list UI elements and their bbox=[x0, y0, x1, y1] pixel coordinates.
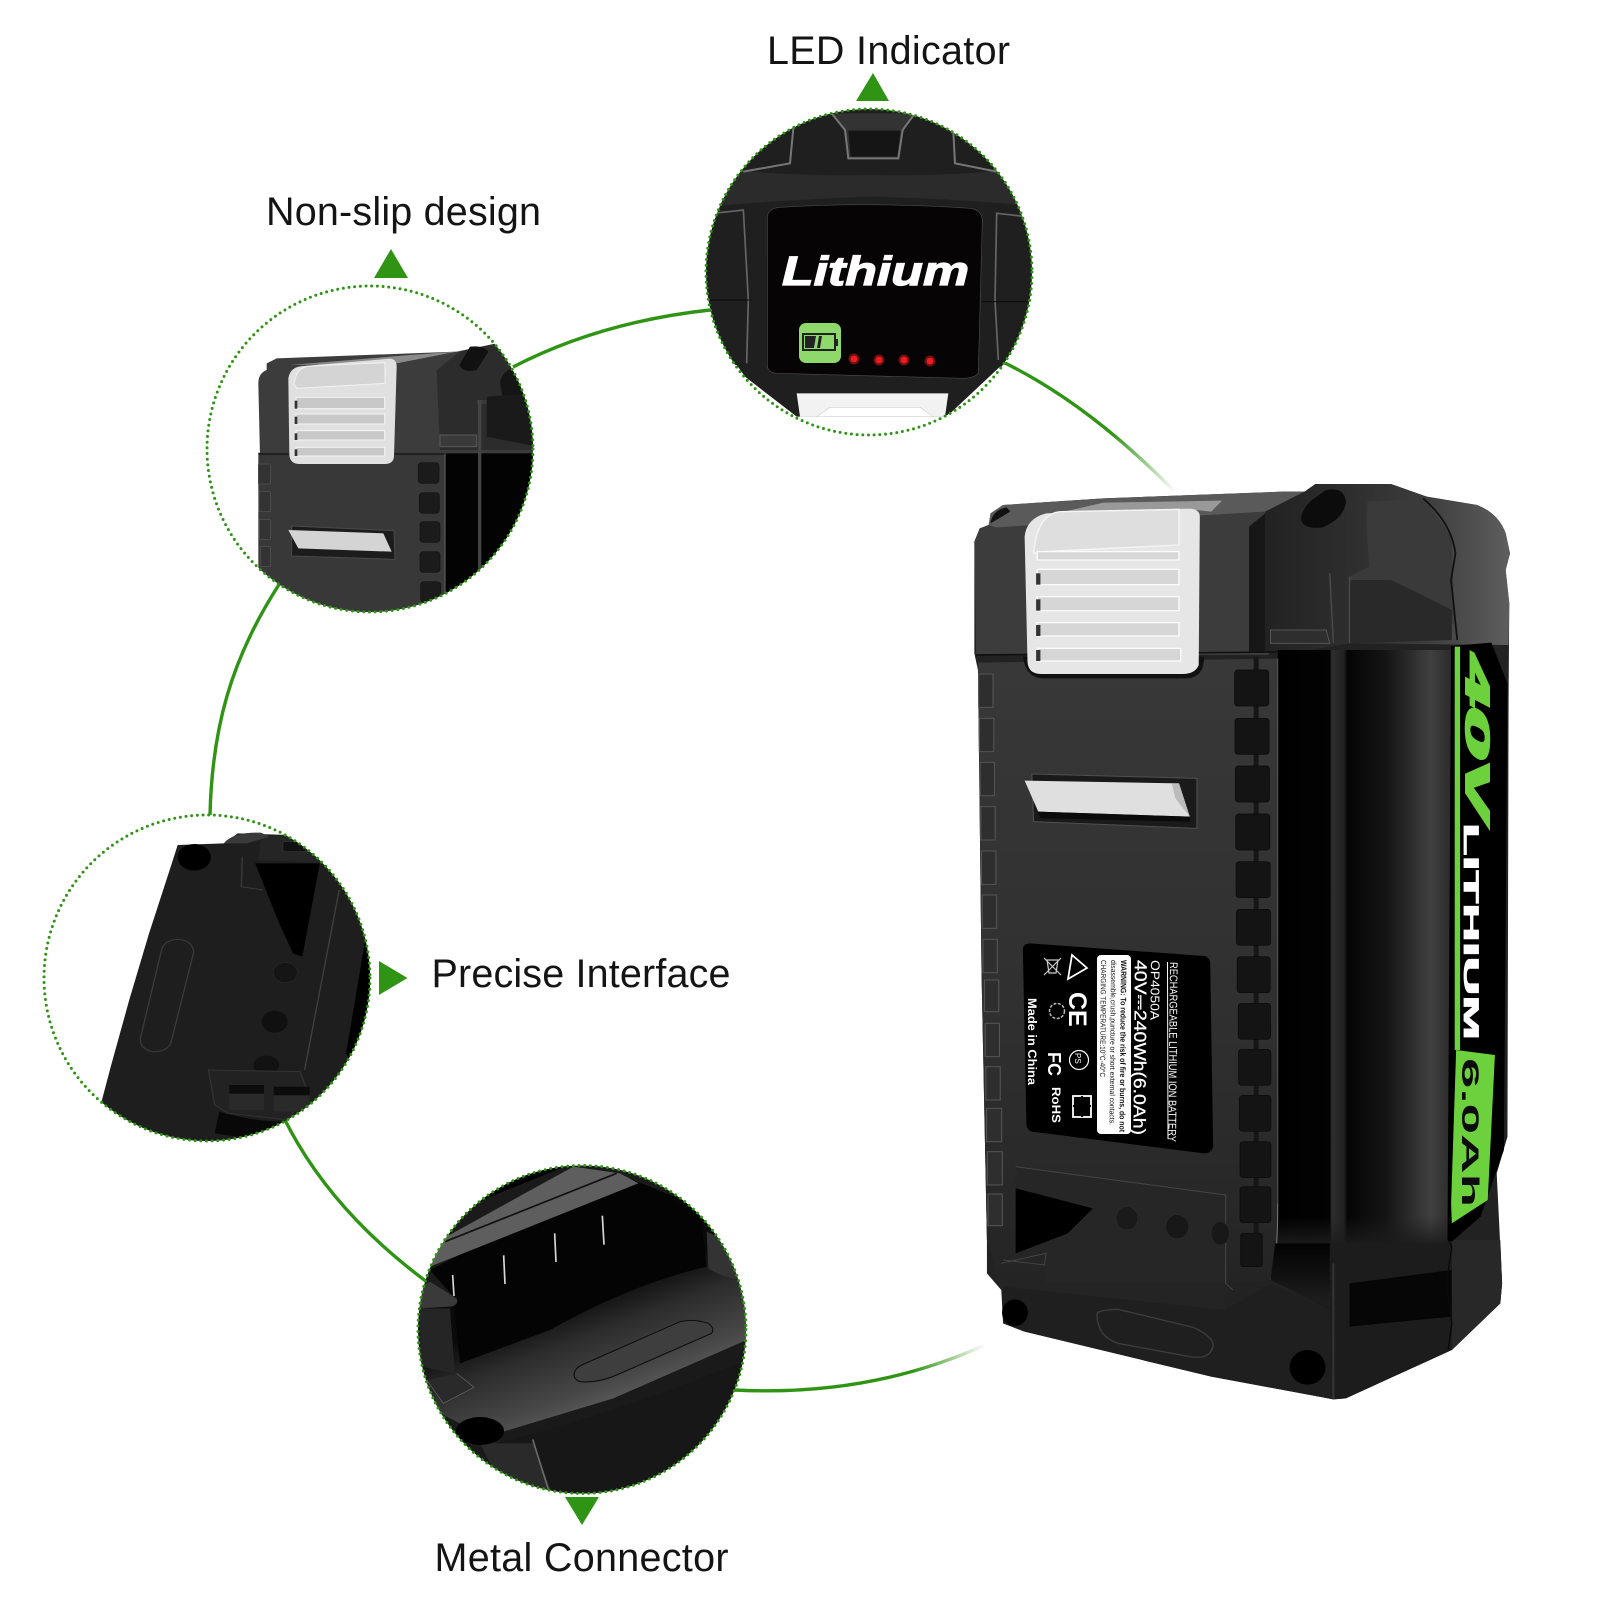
latch shadow bbox=[1023, 657, 1204, 678]
panel: non-slip design close-up bbox=[206, 284, 534, 614]
top block bbox=[974, 510, 1269, 655]
icon: battery status bbox=[799, 323, 841, 363]
arrow: Non-slip design bbox=[374, 249, 408, 278]
sticker text and icons: OP4050A bbox=[1147, 960, 1162, 1021]
label: Precise Interface: Precise Interface bbox=[432, 952, 730, 996]
sticker text and icons: CHARGING TEMPERATURE:10°C-40°C bbox=[1098, 960, 1108, 1078]
battery band text: 40V bbox=[1459, 652, 1496, 828]
front plate bbox=[978, 659, 1278, 1310]
sticker text and icons: WARNING: To reduce the risk of fire or burns, do not bbox=[1117, 960, 1128, 1132]
LED display window bbox=[767, 205, 982, 378]
bottom details bbox=[1003, 1283, 1333, 1399]
label: Non-slip design: Non-slip design bbox=[266, 190, 541, 234]
latch bbox=[288, 359, 397, 464]
sticker text and icons: RoHS bbox=[1049, 1087, 1063, 1123]
arrow: Precise Interface bbox=[379, 961, 408, 995]
battery band text bbox=[1456, 652, 1496, 1207]
battery product image bbox=[974, 484, 1510, 1399]
sticker text and icons: FC bbox=[1044, 1052, 1064, 1076]
label: Metal Connector: Metal Connector bbox=[434, 1536, 728, 1580]
label: LED Indicator: LED Indicator bbox=[767, 29, 1010, 73]
panel: precise interface close-up bbox=[42, 814, 372, 1142]
small latch bbox=[292, 526, 395, 559]
battery band text: LITHIUM bbox=[1459, 823, 1482, 1040]
grip slots bbox=[418, 463, 441, 602]
right edge slots bbox=[1254, 657, 1259, 1257]
arrow: Metal Connector bbox=[565, 1497, 599, 1525]
battery band text: 6.0Ah bbox=[1456, 1058, 1483, 1207]
panel: LED indicator close-up bbox=[704, 108, 1034, 436]
green product band bbox=[1448, 643, 1507, 1242]
top cap bbox=[1265, 484, 1510, 652]
sticker text and icons: Made in China bbox=[1025, 998, 1039, 1085]
side face bbox=[1278, 650, 1452, 1243]
sticker text and icons: disassemble,crush,puncture or short external contacts. bbox=[1108, 960, 1118, 1125]
sticker text and icons: RECHARGEABLE LITHIUM ION BATTERY bbox=[1165, 962, 1179, 1143]
large latch bbox=[1025, 509, 1200, 674]
sticker text and icons bbox=[1025, 955, 1179, 1143]
LED dots bbox=[848, 354, 936, 366]
display: Lithium wordmark: Lithium bbox=[782, 248, 969, 294]
panel: metal connector close-up bbox=[416, 1164, 748, 1495]
lower recess bbox=[1016, 1167, 1226, 1283]
grip slot bbox=[1032, 774, 1197, 828]
left edge ribs bbox=[979, 674, 1002, 1226]
lower body shade bbox=[1271, 1243, 1502, 1399]
sticker text and icons: CE bbox=[1063, 992, 1091, 1027]
sticker text and icons: PS bbox=[1073, 1053, 1082, 1064]
label sticker bbox=[1023, 943, 1213, 1153]
connector lines bbox=[210, 310, 1175, 1391]
sticker text and icons: 40V⎓240Wh(6.0Ah) bbox=[1129, 960, 1150, 1135]
battery body bbox=[974, 484, 1510, 1399]
arrow: LED Indicator bbox=[856, 73, 889, 101]
